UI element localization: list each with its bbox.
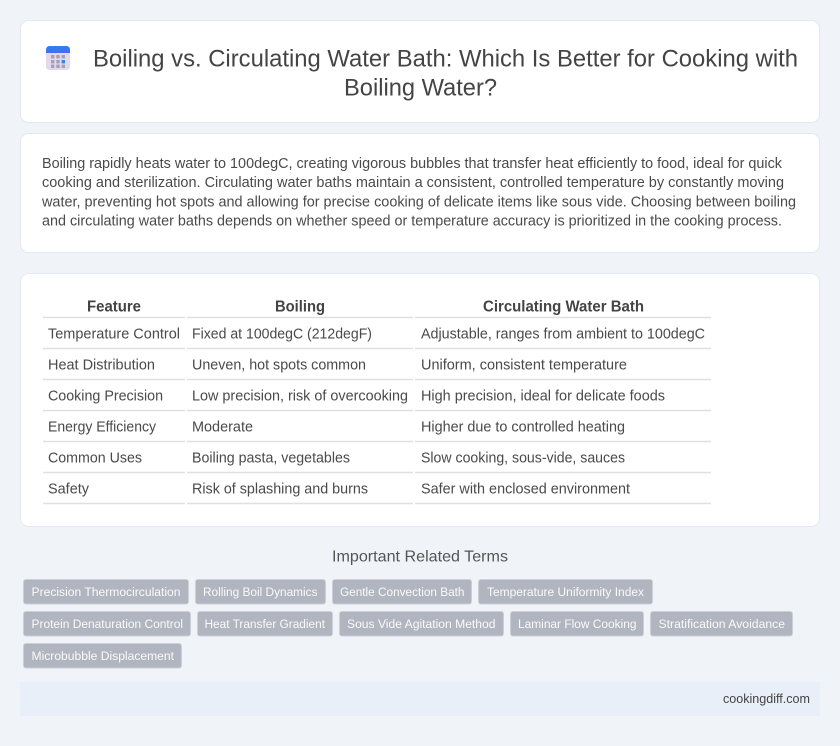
panel: title header xyxy=(20,20,820,122)
row: cooking precision: High precision, ideal for delicate foods xyxy=(421,389,665,405)
tag: Temperature Uniformity Index xyxy=(487,585,644,599)
row: energy efficiency: Energy Efficiency xyxy=(48,420,157,436)
title xyxy=(93,46,798,102)
row: common uses: Common Uses xyxy=(48,451,142,467)
tag: Microbubble Displacement xyxy=(32,649,175,663)
row: temperature control xyxy=(48,327,705,343)
text block: description: and circulating water baths depends on whether speed or temperature accuracy is prioritized in the cooking process. xyxy=(42,214,782,230)
tag xyxy=(478,580,652,604)
tag: Rolling Boil Dynamics xyxy=(203,585,318,599)
title: Boiling Water? xyxy=(344,74,497,102)
tag xyxy=(510,612,644,636)
row: common uses: Boiling pasta, vegetables xyxy=(192,451,350,467)
tag xyxy=(24,644,182,668)
text block: description: Boiling rapidly heats water to 100degC, creating vigorous bubbles that transfer heat efficiently to food, ideal for quick xyxy=(42,156,783,172)
footer: cookingdiff.com xyxy=(723,691,810,706)
tag xyxy=(198,612,332,636)
tag xyxy=(340,612,504,636)
row: common uses: Slow cooking, sous-vide, sauces xyxy=(421,451,625,467)
tag xyxy=(332,580,472,604)
table header: Feature xyxy=(87,298,141,316)
row: safety: Safety xyxy=(48,482,90,498)
row: cooking precision: Cooking Precision xyxy=(48,389,163,405)
text block: description: water, preventing hot spots and allowing for precise cooking of delicate items like sous vide. Choosing between boiling xyxy=(41,194,796,210)
row: energy efficiency xyxy=(48,420,625,436)
row: cooking precision xyxy=(48,389,665,405)
row: temperature control: Fixed at 100degC (212degF) xyxy=(192,327,372,343)
row: temperature control: Temperature Control xyxy=(48,327,180,343)
row: heat distribution: Uneven, hot spots common xyxy=(192,358,366,374)
panel: intro text xyxy=(20,134,820,252)
row: energy efficiency: Higher due to controlled heating xyxy=(421,420,625,436)
tag: Heat Transfer Gradient xyxy=(204,617,326,631)
heading: related terms: Important Related Terms xyxy=(332,549,508,566)
title: Boiling vs. Circulating Water Bath: Which Is Better for Cooking with xyxy=(93,46,798,72)
tag: Protein Denaturation Control xyxy=(32,617,183,631)
table header xyxy=(87,298,644,316)
tag: Laminar Flow Cooking xyxy=(518,617,636,631)
tag: Stratification Avoidance xyxy=(658,617,785,631)
footer xyxy=(20,682,820,716)
row: temperature control: Adjustable, ranges from ambient to 100degC xyxy=(421,327,705,343)
row: energy efficiency: Moderate xyxy=(192,420,253,436)
tag xyxy=(650,612,792,636)
row: common uses xyxy=(48,451,625,467)
tag: Sous Vide Agitation Method xyxy=(347,617,496,631)
row: safety: Safer with enclosed environment xyxy=(421,482,630,498)
tag: Precision Thermocirculation xyxy=(32,585,180,599)
tag xyxy=(24,612,190,636)
panel: comparison table xyxy=(20,274,820,526)
row: heat distribution: Uniform, consistent temperature xyxy=(421,358,627,374)
tag: Gentle Convection Bath xyxy=(340,585,464,599)
row: safety: Risk of splashing and burns xyxy=(192,482,368,498)
tag xyxy=(24,580,188,604)
tag xyxy=(196,580,326,604)
table header: Circulating Water Bath xyxy=(483,298,644,316)
row: safety xyxy=(48,482,630,498)
row: heat distribution xyxy=(48,358,627,374)
row: cooking precision: Low precision, risk of overcooking xyxy=(192,389,408,405)
row: heat distribution: Heat Distribution xyxy=(48,358,155,374)
table header: Boiling xyxy=(275,298,325,316)
tags: related terms xyxy=(24,580,792,668)
text block: description xyxy=(41,156,796,230)
icon: calendar xyxy=(46,46,70,70)
text block: description: cooking and sterilization. Circulating water baths maintain a consistent, controlled temperature by constantly moving xyxy=(42,175,784,191)
